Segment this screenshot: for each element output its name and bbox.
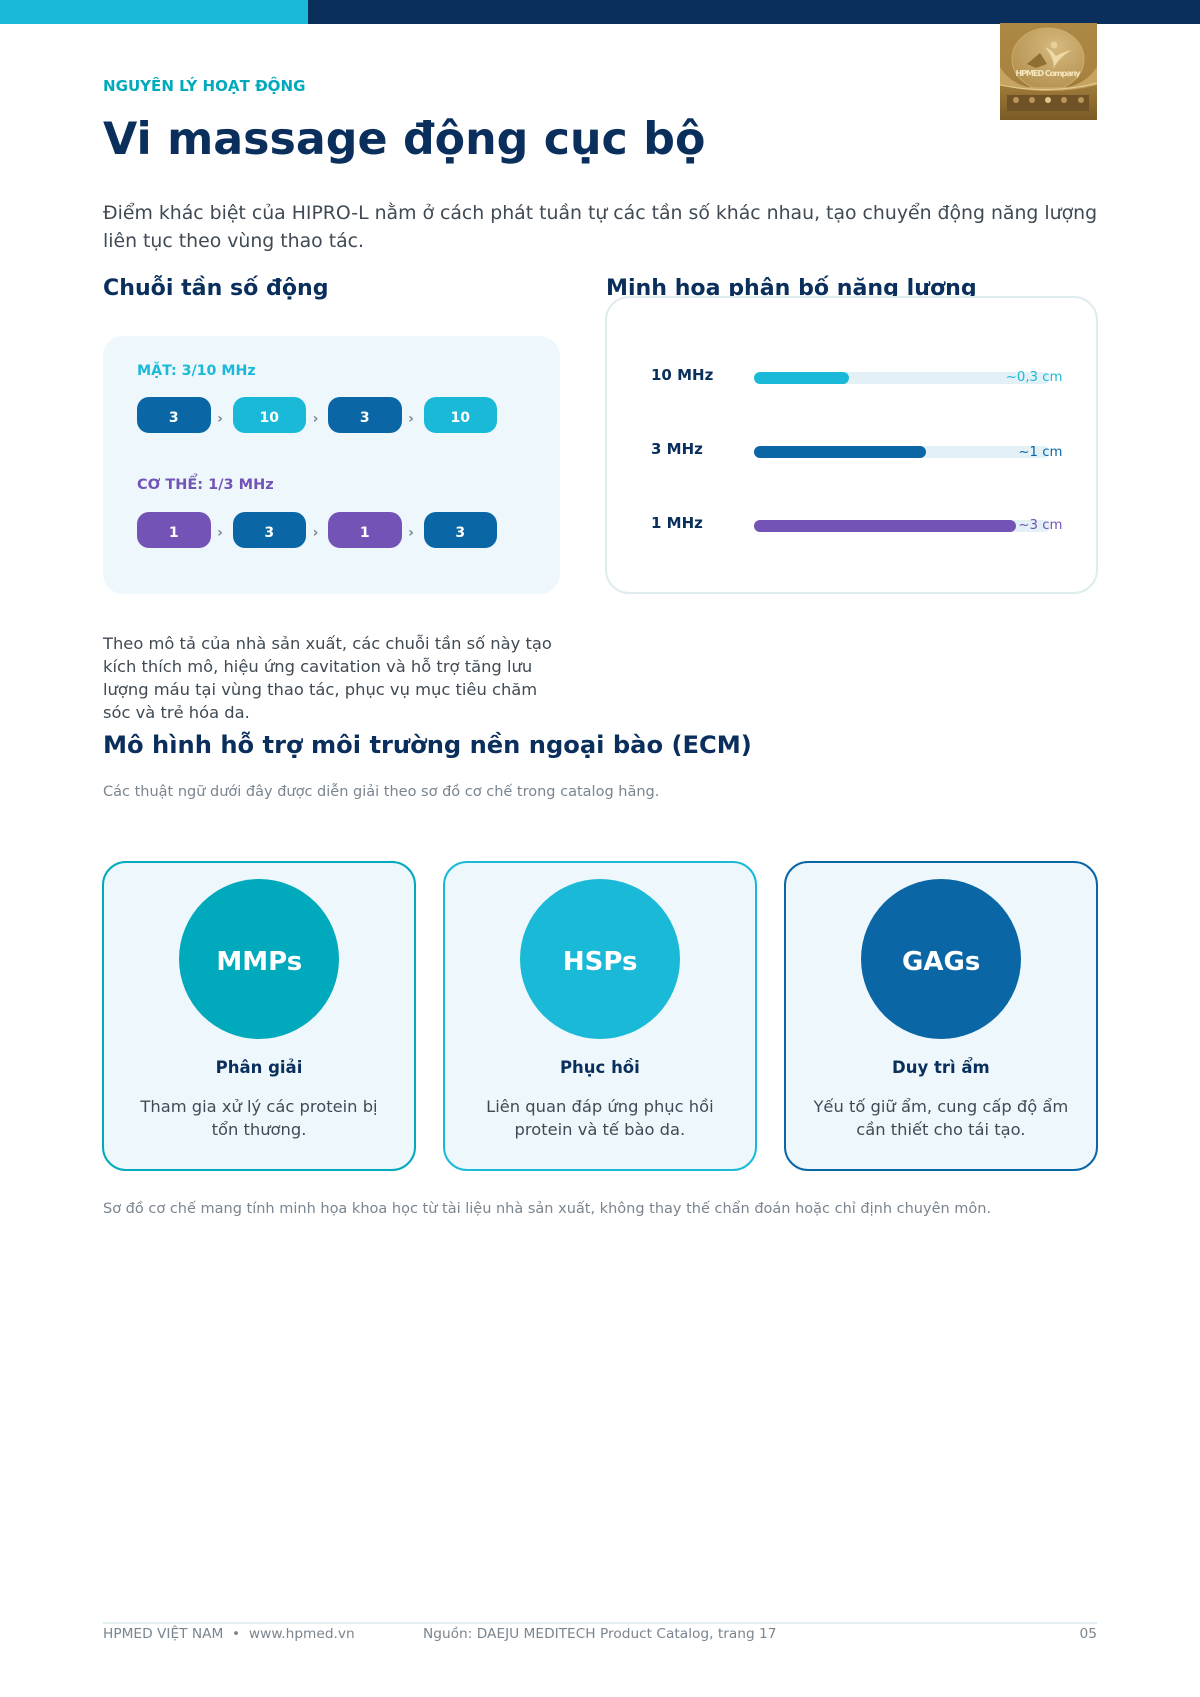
sequence: body: › xyxy=(217,525,223,541)
sequence: face: 3 xyxy=(360,410,370,426)
sequence: body: › xyxy=(313,525,318,541)
body paragraph: Theo mô tả của nhà sản xuất, các chuỗi tần số này tạo xyxy=(103,634,552,653)
sequence: body xyxy=(137,512,497,548)
row: 3 MHz: 3 MHz xyxy=(651,440,703,458)
sequence: face: 10 xyxy=(260,410,279,426)
panel: frequency chains xyxy=(103,336,560,594)
sequence: face: › xyxy=(408,411,414,427)
row: 3 MHz xyxy=(651,440,1062,460)
card: HSPs xyxy=(443,861,757,1171)
body paragraph: sóc và trẻ hóa da. xyxy=(103,703,250,722)
heading: energy distribution: Minh họa phân bố năng lượng xyxy=(606,275,977,301)
footer source: Nguồn: DAEJU MEDITECH Product Catalog, trang 17 xyxy=(423,1626,776,1642)
card description xyxy=(813,1097,1068,1139)
eyebrow: NGUYÊN LÝ HOẠT ĐỘNG xyxy=(103,76,305,94)
sequence: face: 10 xyxy=(450,410,470,426)
sequence: body: 1 xyxy=(360,525,370,541)
heading: ECM: Mô hình hỗ trợ môi trường nền ngoại bào (ECM) xyxy=(103,730,752,758)
sequence: body: 3 xyxy=(455,525,465,541)
card description xyxy=(486,1097,714,1139)
sequence: body: 1 xyxy=(169,525,179,541)
circle: HSPs: HSPs xyxy=(563,947,637,977)
intro text: Điểm khác biệt của HIPRO-L nằm ở cách phát tuần tự các tần số khác nhau, tạo chuyển động năng lượng xyxy=(103,202,1097,224)
sequence: face: › xyxy=(217,411,223,427)
card description: Liên quan đáp ứng phục hồi xyxy=(486,1097,714,1116)
ECM subtitle: Các thuật ngữ dưới đây được diễn giải theo sơ đồ cơ chế trong catalog hãng. xyxy=(103,784,659,800)
row: 1 MHz: ~3 cm xyxy=(1018,518,1062,532)
top bar xyxy=(0,0,1200,24)
sequence: face: › xyxy=(313,411,318,427)
circle: GAGs: GAGs xyxy=(902,947,980,977)
logo xyxy=(1000,23,1097,120)
circle: HSPs xyxy=(520,879,680,1039)
card description: tổn thương. xyxy=(212,1120,306,1139)
sequence: face xyxy=(137,397,497,433)
body paragraph xyxy=(102,634,552,722)
intro text xyxy=(103,202,1097,252)
circle: MMPs: MMPs xyxy=(216,947,302,977)
card description: Yếu tố giữ ẩm, cung cấp độ ẩm xyxy=(813,1097,1068,1116)
footer xyxy=(103,1622,1097,1646)
circle: GAGs xyxy=(861,879,1021,1039)
page number: 05 xyxy=(1080,1626,1097,1642)
row: 3 MHz: ~1 cm xyxy=(1018,444,1062,460)
logo: HPMED Company xyxy=(1016,69,1081,78)
disclaimer note: Sơ đồ cơ chế mang tính minh họa khoa học từ tài liệu nhà sản xuất, không thay thế chẩn đoán hoặc chỉ định chuyên môn. xyxy=(103,1201,991,1217)
intro text: liên tục theo vùng thao tác. xyxy=(103,230,364,252)
footer brand: HPMED VIỆT NAM • www.hpmed.vn xyxy=(103,1626,355,1642)
row: 10 MHz xyxy=(651,366,1062,385)
card title: Phục hồi xyxy=(560,1058,640,1077)
row: 10 MHz: ~0,3 cm xyxy=(1006,370,1062,385)
row: 1 MHz xyxy=(651,514,1062,532)
card: GAGs xyxy=(784,861,1098,1171)
title: Vi massage động cục bộ xyxy=(103,114,705,165)
sequence: face: 3 xyxy=(169,410,179,426)
heading: frequency chain: Chuỗi tần số động xyxy=(103,275,329,301)
row: 10 MHz: 10 MHz xyxy=(651,366,713,384)
body paragraph: kích thích mô, hiệu ứng cavitation và hỗ trợ tăng lưu xyxy=(103,657,532,676)
label: body: CƠ THỂ: 1/3 MHz xyxy=(137,477,274,493)
sequence: body: 3 xyxy=(264,525,274,541)
row: 1 MHz: 1 MHz xyxy=(651,514,703,532)
card description: Tham gia xử lý các protein bị xyxy=(140,1097,378,1116)
label: face: MẶT: 3/10 MHz xyxy=(137,363,256,379)
card: MMPs xyxy=(102,861,416,1171)
card description xyxy=(140,1097,378,1139)
circle: MMPs xyxy=(179,879,339,1039)
card title: Duy trì ẩm xyxy=(892,1058,990,1077)
sequence: body: › xyxy=(408,525,414,541)
card title: Phân giải xyxy=(216,1058,302,1077)
card description: protein và tế bào da. xyxy=(515,1120,685,1139)
card description: cần thiết cho tái tạo. xyxy=(856,1120,1026,1139)
panel: energy chart xyxy=(605,296,1098,594)
body paragraph: lượng máu tại vùng thao tác, phục vụ mục tiêu chăm xyxy=(103,680,537,699)
top bar accent xyxy=(0,0,308,24)
